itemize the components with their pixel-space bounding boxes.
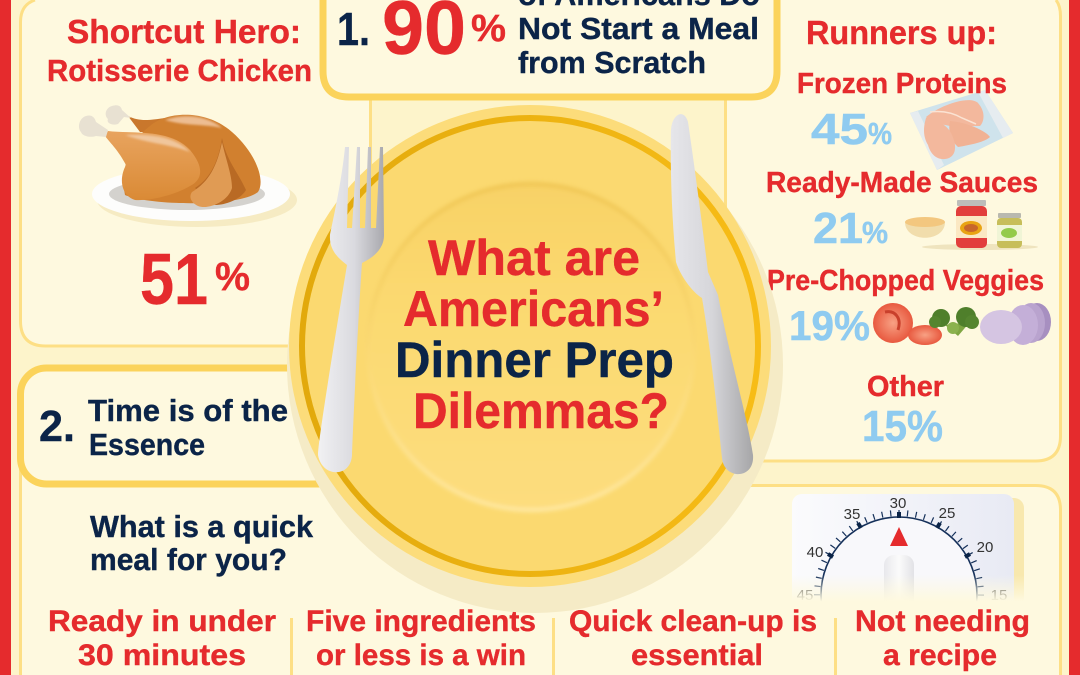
statistic: 45 percent: % <box>868 116 892 151</box>
panel: runners up <box>726 0 1060 461</box>
title: Dilemmas? <box>413 383 669 439</box>
icon: kitchen timer: 45 <box>797 587 813 604</box>
answer: five ingredients: or less is a win <box>316 639 526 672</box>
answer: ready in under 30 minutes <box>48 605 276 672</box>
statistic: 21 percent <box>813 204 888 253</box>
statistic: 51 percent: % <box>215 255 250 299</box>
icon: knife <box>671 114 753 474</box>
icon: chopped vegetables <box>873 303 1051 345</box>
callout: 90 percent: from Scratch <box>518 45 706 80</box>
icon: kitchen timer: 15 <box>991 587 1007 604</box>
label: other: Other <box>867 371 944 403</box>
right red border <box>1069 0 1080 675</box>
left red border <box>0 0 11 675</box>
panel: quick meal <box>20 470 1060 675</box>
heading: shortcut hero: Shortcut Hero: <box>67 13 301 50</box>
callout: 90 percent: % <box>471 8 506 50</box>
answer: five ingredients: Five ingredients <box>306 605 536 638</box>
heading: rotisserie chicken: Rotisserie Chicken <box>47 53 312 88</box>
title: Dinner Prep <box>395 332 674 388</box>
answer: quick clean-up <box>569 605 817 672</box>
icon: kitchen timer: 40 <box>807 544 823 561</box>
title: Americans’ <box>403 281 664 337</box>
label: frozen proteins: Frozen Proteins <box>797 68 1007 100</box>
answer: quick clean-up: Quick clean-up is <box>569 605 817 638</box>
answer: not needing a recipe: Not needing <box>855 605 1030 638</box>
statistic: 45 percent <box>811 105 892 154</box>
answer: five ingredients <box>306 605 536 672</box>
callout: time is of the essence: Essence <box>89 427 205 462</box>
statistic: 19 percent: 19% <box>789 302 870 349</box>
statistic: 45 percent: 45 <box>811 105 868 154</box>
callout: 90 percent <box>323 0 777 97</box>
answer: quick clean-up: essential <box>631 639 763 672</box>
answer: ready in under 30 minutes: 30 minutes <box>78 639 246 672</box>
icon: kitchen timer: 35 <box>844 506 860 523</box>
icon: kitchen timer: 20 <box>977 539 993 556</box>
icon: kitchen timer: 30 <box>890 495 906 512</box>
callout: time is of the essence: Time is of the <box>88 393 288 428</box>
label: pre-chopped veggies: Pre-Chopped Veggies <box>767 265 1044 297</box>
title <box>395 230 674 439</box>
icon: kitchen timer: 25 <box>939 505 955 522</box>
icon: sauces <box>905 200 1038 250</box>
answer: not needing a recipe: a recipe <box>883 639 997 672</box>
statistic: 21 percent: % <box>862 215 888 250</box>
statistic: 51 percent: 51 <box>140 240 208 320</box>
callout: 90 percent: 1. <box>337 3 370 55</box>
panel: shortcut hero <box>20 0 370 346</box>
icon: frozen chicken bag <box>910 90 1013 170</box>
label: ready-made sauces: Ready-Made Sauces <box>766 167 1038 199</box>
heading: runners up: Runners up: <box>806 14 997 51</box>
illustration: dinner plate <box>287 105 783 613</box>
icon: rotisserie chicken on plate <box>79 105 297 227</box>
answer: not needing a recipe <box>855 605 1030 672</box>
statistic: 15 percent: 15% <box>862 402 943 451</box>
question: what is a quick meal: What is a quick <box>90 509 314 544</box>
question: what is a quick meal <box>90 509 314 577</box>
callout: time is of the essence <box>20 368 420 484</box>
callout: 90 percent: Not Start a Meal <box>518 11 759 46</box>
icon: fork <box>318 147 384 472</box>
statistic: 21 percent: 21 <box>813 204 863 253</box>
icon: kitchen timer <box>792 494 1024 600</box>
callout: time is of the essence: 2. <box>39 402 75 451</box>
answer: ready in under 30 minutes: Ready in under <box>48 605 276 638</box>
question: what is a quick meal: meal for you? <box>90 542 287 577</box>
title: What are <box>428 230 640 286</box>
